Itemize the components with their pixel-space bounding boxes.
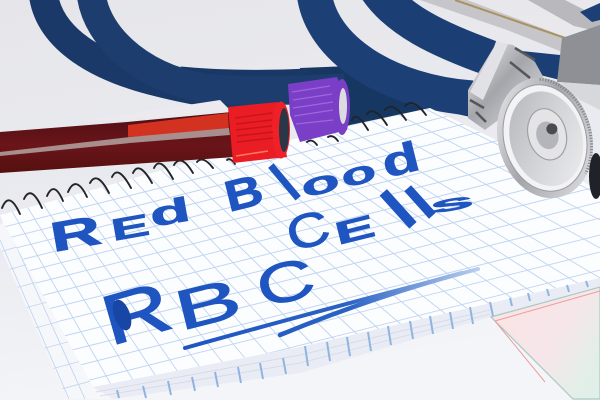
handwritten word: Red xyxy=(47,190,193,261)
handwritten word: Cells: l xyxy=(370,179,428,241)
underline strokes xyxy=(185,269,478,348)
handwritten word: Cells: E xyxy=(331,209,379,252)
stethoscope ferrule xyxy=(468,42,600,130)
handwritten word: Red: d xyxy=(147,190,193,235)
spiral binding coils xyxy=(2,103,426,214)
handwritten word: Cells: l xyxy=(396,176,446,229)
handwritten abbreviation: RBC xyxy=(92,244,321,361)
handwritten abbreviation: RBC: C xyxy=(250,244,321,320)
red tube cap xyxy=(228,102,290,163)
handwritten word: Blood: l xyxy=(260,155,311,212)
rubber tip xyxy=(589,153,600,199)
purple tube cap xyxy=(288,77,350,142)
handwritten word: Cells: s xyxy=(428,188,476,219)
notebook page block edge xyxy=(93,278,600,399)
handwritten word: Red: R xyxy=(47,207,105,261)
handwritten word: Cells xyxy=(280,176,476,262)
stethoscope chest piece xyxy=(484,67,600,209)
handwritten word: Blood: o xyxy=(297,161,343,205)
glass slide xyxy=(491,287,600,399)
handwritten word: Cells: C xyxy=(280,200,336,262)
notebook page with grid xyxy=(0,108,600,386)
handwritten word: Red: E xyxy=(108,207,152,248)
stethoscope metal rods xyxy=(420,0,600,85)
handwritten word: Blood xyxy=(220,133,424,222)
blood tube red xyxy=(0,100,235,173)
handwritten abbreviation: RBC: R xyxy=(92,266,180,361)
handwritten word: Blood: d xyxy=(377,133,424,187)
handwritten abbreviation: RBC: B xyxy=(168,267,248,343)
handwritten word: Blood: B xyxy=(220,166,268,222)
notebook lower pages xyxy=(0,222,90,399)
handwritten word: Blood: o xyxy=(337,152,379,195)
stethoscope tubing xyxy=(43,0,560,142)
